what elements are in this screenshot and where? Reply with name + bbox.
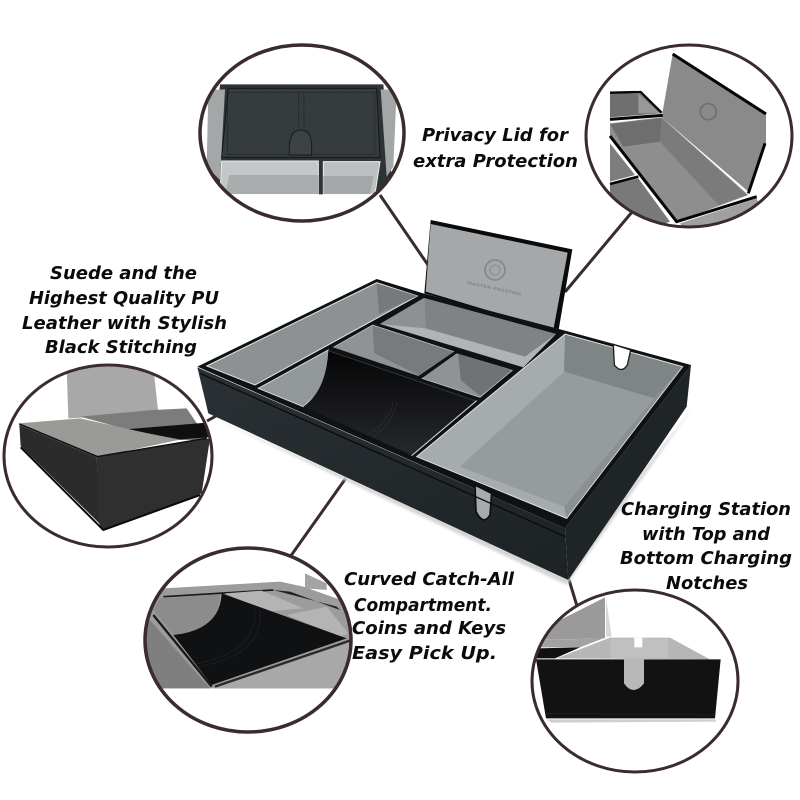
raised suede lid	[662, 54, 766, 193]
text: privacy lid	[413, 125, 578, 172]
text: curved catch-all: Easy Pick Up.	[352, 643, 497, 664]
text: curved catch-all	[344, 569, 515, 664]
front edge stitch	[200, 373, 565, 537]
text: charging station: with Top and	[642, 524, 771, 545]
lid back	[67, 367, 158, 418]
left side wall	[207, 89, 225, 180]
text: suede and leather: Leather with Stylish	[22, 313, 227, 334]
base edge	[21, 447, 200, 530]
privacy lid raised	[424, 220, 572, 332]
tray back edge	[210, 84, 393, 197]
compartment: large charging	[417, 334, 683, 518]
left suede wall	[153, 594, 220, 635]
raised lid edge	[545, 598, 605, 640]
front leather side	[97, 438, 210, 531]
compartment: upper under lid	[380, 298, 556, 367]
privacy lid raised: MASTER PRESTIGE	[466, 280, 523, 297]
tray drop shadow	[210, 407, 693, 585]
text: curved catch-all: Coins and Keys	[352, 618, 506, 639]
black compartment	[127, 423, 208, 439]
left leather side	[19, 425, 100, 524]
charging notch: front	[475, 485, 492, 520]
suede interior	[557, 638, 710, 659]
charging notch: back	[613, 344, 631, 369]
right side wall	[381, 89, 397, 177]
compartment: long left	[207, 283, 417, 385]
area beneath the crop	[232, 194, 372, 197]
black front panel	[536, 659, 721, 718]
compartment: small	[422, 353, 513, 397]
shadow under tray	[547, 719, 717, 723]
text: charging station: Charging Station	[621, 499, 791, 520]
text: curved catch-all: Compartment.	[354, 595, 492, 616]
left side band	[140, 620, 210, 688]
long suede compartment	[610, 117, 757, 222]
black curved liner	[173, 593, 347, 685]
text: charging station: Notches	[666, 573, 748, 594]
text: suede and leather	[22, 263, 227, 358]
text: charging station: Bottom Charging	[620, 548, 792, 569]
callout: suede lid close-up	[586, 45, 792, 237]
tray top rim	[197, 279, 691, 528]
text: curved catch-all: Curved Catch-All	[344, 569, 515, 590]
text: charging station	[620, 499, 792, 594]
black leather lid	[222, 88, 380, 157]
text: suede and leather: Highest Quality PU	[29, 288, 219, 309]
callout: leather side close-up	[4, 365, 212, 547]
text: suede and leather: Black Stitching	[45, 337, 197, 358]
gray base of the crop	[140, 582, 360, 688]
text: privacy lid: Privacy Lid for	[422, 125, 569, 146]
back surface	[80, 408, 208, 440]
leather top edge stitch	[19, 424, 207, 457]
front charging notch	[624, 658, 644, 690]
product: valet tray with lid	[197, 220, 693, 585]
back right divider	[305, 573, 327, 590]
top surface	[18, 418, 178, 457]
text: privacy lid: extra Protection	[413, 151, 578, 172]
compartment: curved catch-all	[258, 350, 477, 456]
small back compartment	[610, 92, 663, 119]
callout: charging notch close-up	[532, 590, 738, 772]
compartment right	[323, 162, 380, 194]
text: suede and leather: Suede and the	[50, 263, 197, 284]
connector lines	[207, 195, 632, 606]
compartment left	[220, 161, 318, 194]
tray outer body	[197, 365, 691, 580]
lower left compartments	[610, 143, 635, 182]
callout: privacy lid close-up	[198, 43, 406, 223]
front rim	[213, 642, 360, 688]
callout: curved compartment close-up	[140, 548, 360, 732]
small lighter compartments	[225, 591, 303, 612]
compartment: middle	[333, 325, 454, 376]
